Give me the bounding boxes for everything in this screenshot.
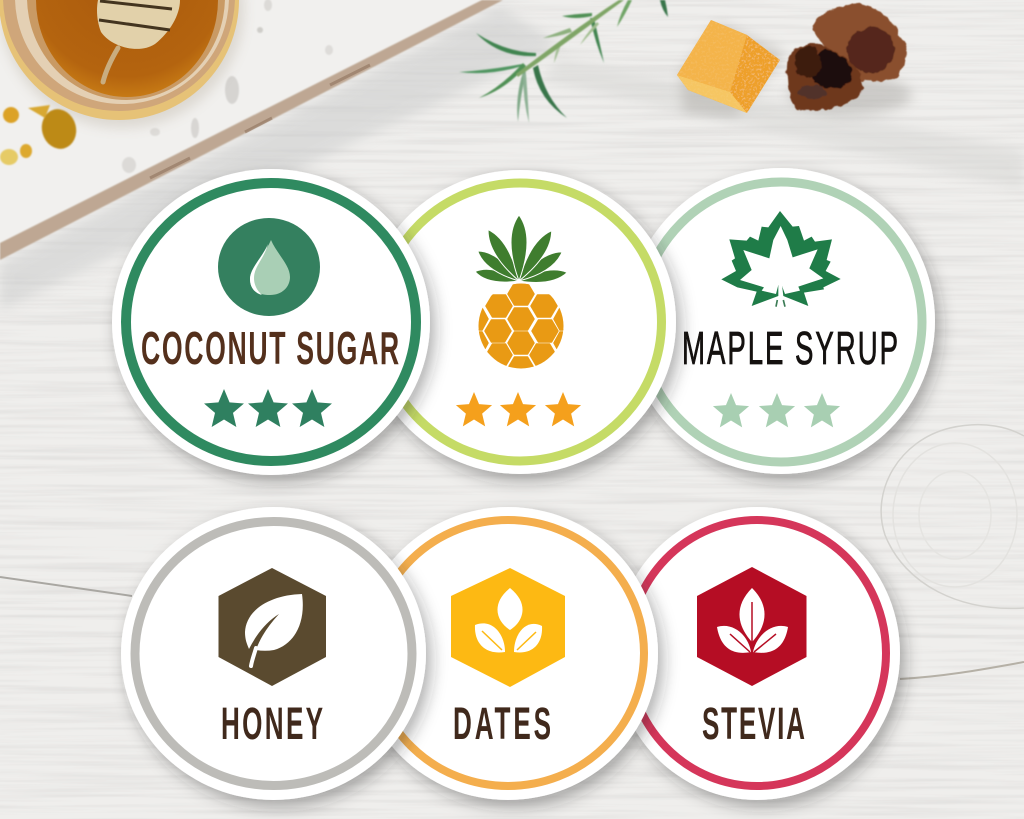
icon: pineapple honeycomb body <box>478 284 564 368</box>
stevia ring <box>628 520 886 786</box>
label: coconut sugar: COCONUT SUGAR <box>141 322 399 374</box>
label: maple syrup: MAPLE SYRUP <box>682 324 898 375</box>
maple ring <box>640 182 922 462</box>
badge: pineapple <box>364 170 676 474</box>
icon: dates hexagon <box>451 568 565 687</box>
dried dates <box>786 4 912 115</box>
badge: dates <box>358 507 658 800</box>
pineapple ring <box>378 183 662 461</box>
jaggery cube <box>677 20 782 116</box>
rating stars: maple <box>713 393 840 427</box>
icon: leaf hexagon <box>218 568 326 686</box>
badge: honey <box>121 507 426 800</box>
rosemary sprig <box>459 0 668 123</box>
badge: stevia <box>614 507 900 800</box>
honey jar with dipper <box>0 0 244 128</box>
dates ring <box>372 520 644 786</box>
icon: water drop <box>218 218 320 316</box>
white board with wooden edge <box>0 0 503 260</box>
label: stevia: STEVIA <box>702 699 805 749</box>
icon: maple leaf <box>721 211 841 307</box>
icon: stevia hexagon <box>697 567 806 686</box>
label: honey: HONEY <box>221 699 323 749</box>
badge: coconut sugar <box>112 169 430 475</box>
badge: maple syrup <box>627 168 935 474</box>
icon: pineapple leaves <box>474 215 568 286</box>
coconut ring <box>126 183 416 461</box>
honey dipper <box>97 0 180 82</box>
honey ring <box>135 522 412 786</box>
honey drops <box>0 105 81 165</box>
label: dates: DATES <box>453 699 551 749</box>
rating stars: coconut <box>204 389 332 427</box>
rating stars: pineapple <box>456 392 581 426</box>
